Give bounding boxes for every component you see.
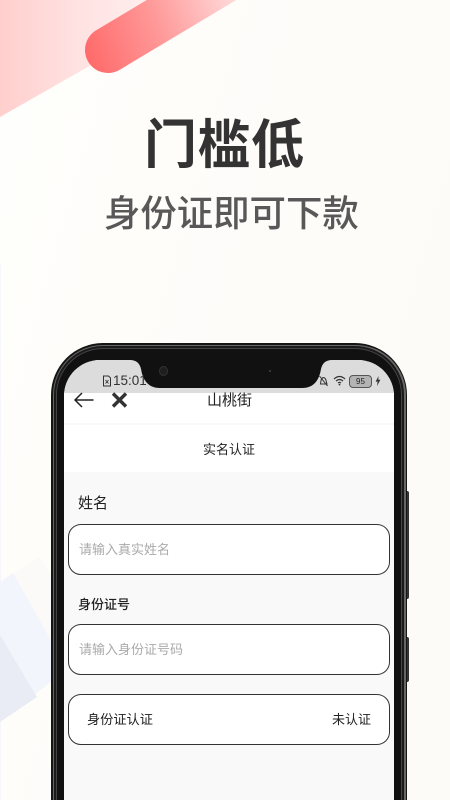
row status: 未认证 [332, 712, 371, 727]
status: time: 15:01 [113, 373, 147, 388]
status: bell muted icon [319, 376, 328, 386]
row label: 身份证认证 [87, 712, 153, 727]
status: charging bolt [376, 376, 380, 386]
status: wifi icon [334, 376, 346, 386]
status bar [64, 360, 394, 393]
id verification row [68, 694, 390, 745]
id input [68, 624, 390, 675]
app name: 山桃街 [207, 392, 252, 409]
sensor dot [269, 370, 271, 372]
back arrow icon [74, 392, 94, 408]
title: 门槛低 [144, 116, 304, 175]
name placeholder: 请输入真实姓名 [79, 542, 170, 557]
name input [68, 524, 390, 575]
screen [64, 360, 394, 800]
status: battery: 95 [356, 377, 365, 386]
notch [130, 360, 332, 388]
id placeholder: 请输入身份证号码 [79, 642, 183, 657]
phone body [51, 343, 407, 800]
header white area [64, 393, 394, 472]
status: sim icon [103, 376, 111, 386]
side buttons [405, 491, 409, 599]
subtitle: 身份证即可下款 [104, 193, 359, 234]
close icon [112, 392, 128, 408]
label: name: 姓名 [78, 495, 108, 512]
page title: 实名认证 [203, 442, 255, 457]
camera [159, 366, 168, 376]
status: battery [349, 375, 372, 388]
label: id number: 身份证号 [78, 597, 130, 612]
